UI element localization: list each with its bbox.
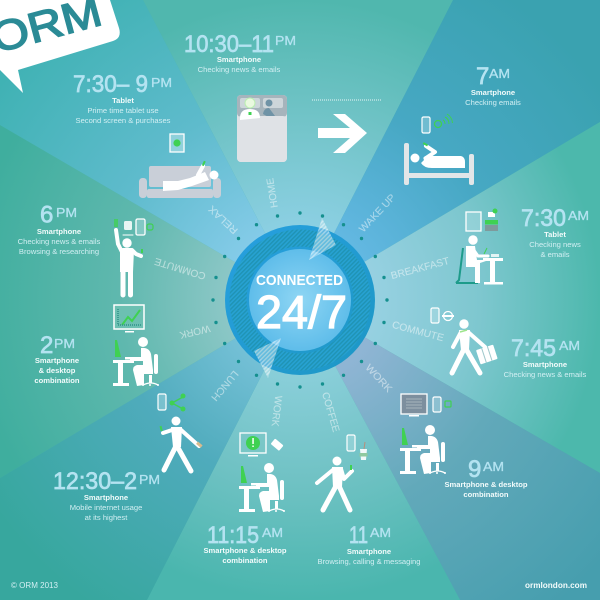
icon: phone and alarm clock (7am) [422,114,452,133]
icon: monitor, phone and plus (9am) [401,394,451,416]
time block: 10:30-11 PM: PM [275,34,296,48]
time block: 7:30 AM: Checking news [529,240,581,249]
time block: 6 PM [18,202,101,256]
time block: 6 PM: Browsing & researching [19,247,99,256]
activity labels around the dial: RELAX [207,203,241,236]
time block: 7:30 AM: AM [568,209,589,223]
time block: 7:30 AM: 7:30 [521,205,566,232]
central ring [225,218,375,378]
icon: tablet (evening) [170,134,184,152]
activity labels around the dial: WORK [269,395,283,427]
time block: 12:30-2 PM: Smartphone [84,493,128,502]
time block: 10:30-11 PM: Smartphone [217,55,261,64]
footer: copyright: © ORM 2013 [11,581,58,590]
icon: person at desk (9am) [400,425,446,474]
icon: double bed [237,95,287,162]
icon: walking person (lunch) [160,416,203,471]
time block: 7:45 AM: 7:45 [511,335,556,362]
time block: 11:15 AM: Smartphone & desktop [203,546,287,555]
time block: 7:30-9 PM [73,71,172,125]
time block: 7:30 AM: & emails [540,250,570,259]
activity labels around the dial [153,177,451,434]
time block: 6 PM: 6 [40,202,53,228]
time block: 7:30-9 PM: Tablet [112,96,134,105]
time block: 9 AM: AM [483,460,504,474]
icon: person on sofa [139,161,221,198]
logo: ORM speech bubble [0,0,120,93]
icon: phone and network nodes (lunch) [158,394,186,412]
activity labels around the dial: WAKE UP [357,192,398,235]
time block: 2 PM: PM [54,337,75,351]
time block: 12:30-2 PM: at its highest [85,513,128,522]
time block: 11:15 AM: combination [222,556,268,565]
time block: 11 AM: 11 [349,522,368,549]
time block: 6 PM: PM [56,206,77,220]
time block: 11:15 AM [203,522,287,565]
time block: 12:30-2 PM [53,468,160,522]
icon: phone, train and standing person (6pm) [114,219,153,295]
activity labels around the dial: BREAKFAST [390,256,451,282]
time block: 10:30-11 PM: 10:30–11 [184,31,274,58]
icon: desktop monitor with chart (2pm) [114,305,144,332]
time block: 11 AM: AM [370,526,391,540]
icon: tablet, email and stack (7:30) [466,208,498,231]
time block: 7:30 AM [521,205,589,259]
time block: 6 PM: Checking news & emails [18,237,101,246]
footer: website: ormlondon.com [525,581,587,590]
time block: 7:30-9 PM: Prime time tablet use [87,106,159,115]
icon: person at desk (2pm) [113,337,159,386]
time block: 7:45 AM: Smartphone [523,360,567,369]
activity labels around the dial: COMMUTE [391,320,445,344]
time block: 7 AM [465,63,521,107]
time block: 12:30-2 PM: 12:30–2 [53,468,137,495]
time block: 7:45 AM: Checking news & emails [504,370,587,379]
time block: 7:30-9 PM: 7:30– 9 [73,71,148,98]
time block: 2 PM: & desktop [39,366,76,375]
time block: 2 PM [34,332,80,385]
time block: 12:30-2 PM: Mobile internet usage [70,503,142,512]
time block: 7 AM: Smartphone [471,88,515,97]
time block: 10:30-11 PM: Checking news & emails [198,65,281,74]
time block: 2 PM: 2 [40,332,53,359]
activity labels around the dial: COFFEE [319,391,341,434]
heading: Connected 24/7: CONNECTED [256,272,343,289]
time block: 11:15 AM: 11:15 [207,522,259,549]
time block: 9 AM: Smartphone & desktop [444,480,528,489]
time block: 9 AM: 9 [468,456,481,483]
heading: Connected 24/7: 24/7 [256,286,347,338]
time block: 7 AM: Checking emails [465,98,521,107]
time block: 11 AM [318,522,420,566]
time block: 7:45 AM [504,335,587,379]
icon: phone and underground roundel (7:45) [431,308,454,323]
activity labels around the dial: LUNCH [208,368,240,403]
time block: 7 AM: AM [489,67,510,81]
time block: 6 PM: Smartphone [37,227,81,236]
activity labels around the dial: WORK [363,362,394,395]
time block: 7 AM: 7 [476,63,489,90]
icon: commuter with briefcase (7:45) [452,319,498,373]
time block: 12:30-2 PM: PM [139,473,160,487]
icon: monitor alert and price tag (11:15) [240,433,284,456]
icon: phone and coffee cup (11am) [347,435,368,460]
time block: 10:30-11 PM [184,31,296,74]
time block: 11:15 AM: AM [262,526,283,540]
time block: 11 AM: Smartphone [347,547,391,556]
activity labels around the dial: WORK [178,322,211,340]
time block: 7:30-9 PM: PM [151,76,172,90]
icon: person in bed (7am) [404,142,474,185]
time block: 7:30 AM: Tablet [544,230,566,239]
time block: 2 PM: combination [34,376,80,385]
icon: person at desk (11:15) [239,463,285,512]
dial dots [211,211,389,389]
activity labels around the dial: COMMUTE [153,255,207,281]
time block: 2 PM: Smartphone [35,356,79,365]
activity labels around the dial: HOME [265,177,281,209]
time block: 11 AM: Browsing, calling & messaging [318,557,420,566]
time block: 9 AM: combination [463,490,509,499]
icon: person at breakfast table [456,235,503,284]
dotted divider and arrow [312,100,381,153]
icon: walking person (11am) [317,456,352,510]
time block: 9 AM [444,456,528,499]
time block: 7:45 AM: AM [559,339,580,353]
time block: 7:30-9 PM: Second screen & purchases [76,116,171,125]
